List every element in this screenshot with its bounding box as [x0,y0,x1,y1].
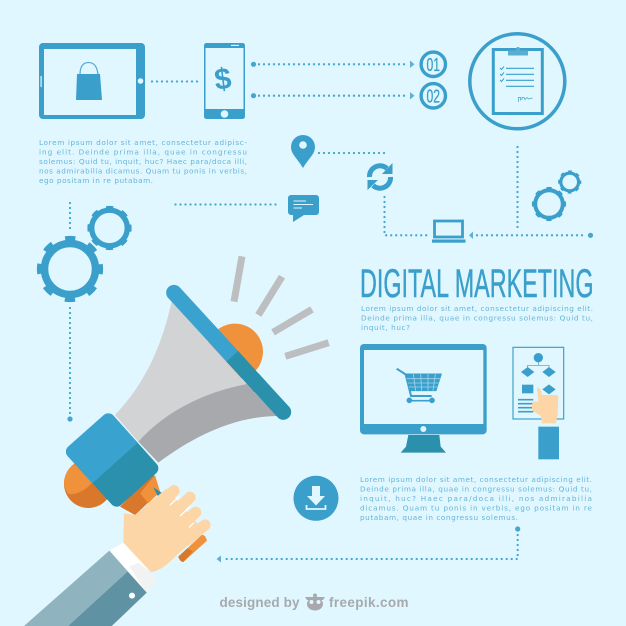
arrow: dots down to gears [69,203,71,230]
text block: bottom paragraph: putabam, quae in congressu solemus. [360,513,518,522]
text block: under title [361,304,593,332]
arrow: pin to sync dots [319,152,385,154]
footer credit: designed by [220,595,300,610]
text block: bottom paragraph: Deinde prima illa, quae in congressu solemus: Quid tu, [360,484,592,494]
shopping cart [397,369,441,403]
handle block [73,420,152,500]
icon: phone with dollar [204,43,245,119]
text block: top left paragraph [39,138,247,185]
icon: location pin [291,135,315,168]
icon: clipboard in circle [470,34,565,129]
text block: top left paragraph: nos admirabilia dicamus. Quam tu ponis in verbis, [39,166,247,176]
icon: flowchart with pointing hand [513,347,564,459]
text block: top left paragraph: ing elit. Deinde prima illa, quae in congressu [39,148,247,156]
rear orange cap [64,459,113,508]
icon: download circle [294,476,338,521]
footer credit: freepik.com [329,595,408,610]
hand [123,488,205,572]
arrow: dotted line to 02 [251,92,414,100]
text block: under title: inquit, huc? [361,323,410,332]
text block: bottom paragraph: dicamus. Quam tu ponis in verbis, ego positam in re [360,504,592,512]
icon: sync arrows [368,163,392,190]
arrow: bottom dotted line [216,526,520,562]
cone [115,302,277,463]
text block: bottom paragraph [360,475,592,522]
badge: 02: 02 [427,86,440,106]
shirt cuff [109,543,156,593]
suit sleeve [24,551,147,626]
rim [174,293,283,412]
arrow: dots to chat bubble [176,203,280,206]
text block: top left paragraph: ego positam in re putabam. [39,176,153,185]
arrow: dots into laptop [469,232,593,239]
badge: 01 [421,52,445,76]
arrow: clipboard down dots [516,147,519,231]
text block: bottom paragraph: Lorem ipsum dolor sit amet, consectetur adipiscing elit. [360,475,592,484]
orange handle [120,473,207,562]
text block: top left paragraph: Lorem ipsum dolor sit amet, consectetur adipisc- [39,138,247,147]
footer credit [220,594,408,610]
icon: phone with dollar: $ [213,62,233,97]
icon: monitor with shopping cart [360,344,487,453]
arrow: dots from gear to bottom [67,308,73,422]
arrow: tablet to phone dots [152,80,198,83]
badge: 02 [421,84,445,108]
text block: under title: Lorem ipsum dolor sit amet, consectetur adipiscing elit. [361,304,593,313]
megaphone and hand [24,256,329,626]
icon: freepik logo [305,594,325,610]
icon: chat bubble [288,195,319,222]
arrow: sync to laptop dots [384,197,427,235]
icon: tablet with shopping bag [39,43,145,119]
text block: bottom paragraph: inquit, huc? Haec para/doca illi, nos admirabilia [360,494,592,503]
arrow: dotted line to 01 [251,60,414,68]
text block: under title: Deinde prima illa, quae in congressu solemus: Quid tu, [361,314,593,322]
sound rays [234,256,329,356]
icon: laptop [432,221,466,243]
icon: small gears right [534,172,580,220]
text block: top left paragraph: solemus: Quid tu, inquit, huc? Haec para/doca illi, [39,157,247,166]
badge: 01: 01 [427,54,440,75]
icon: large gears left [40,208,130,299]
orange speaker dome [207,324,263,380]
